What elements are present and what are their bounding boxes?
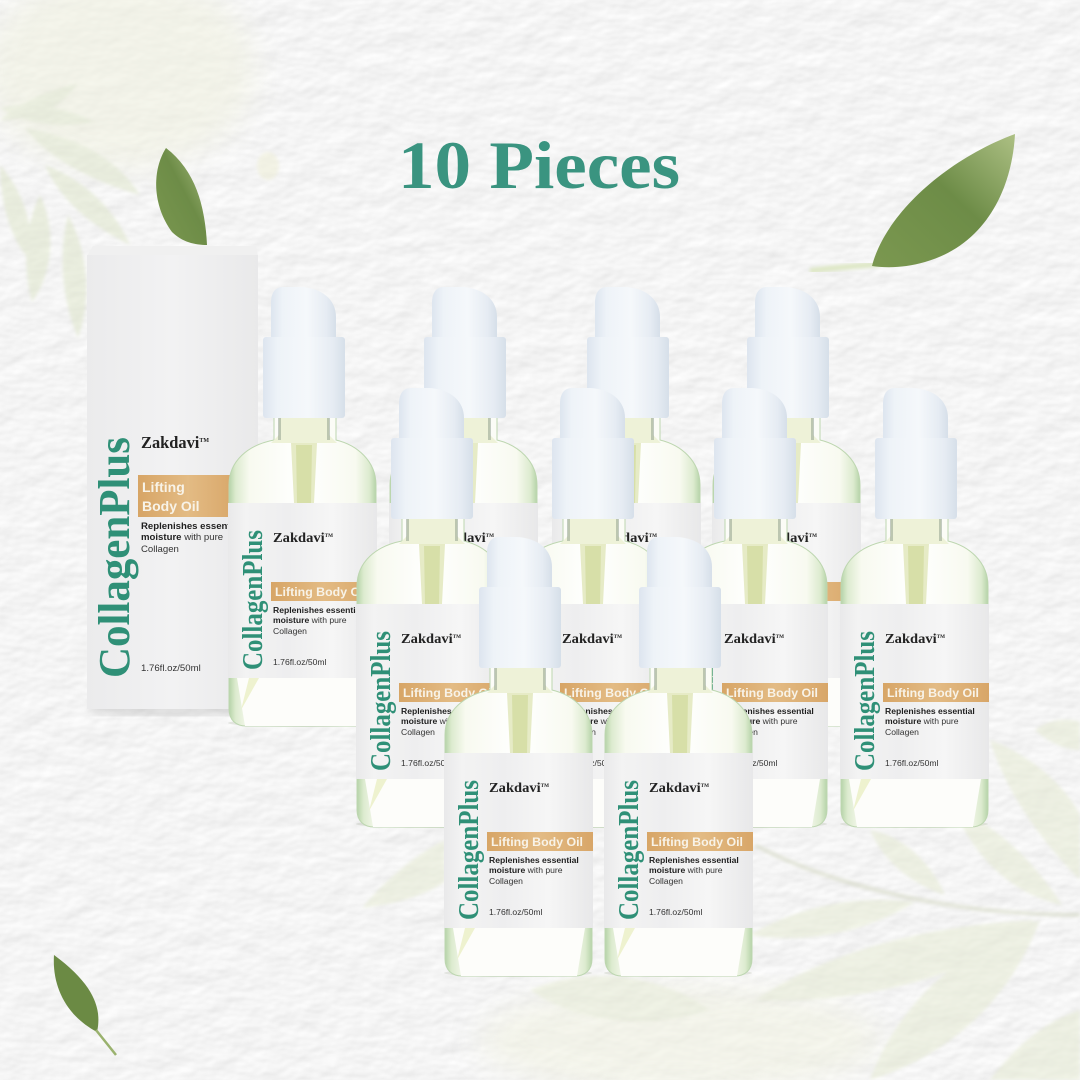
- bottle middle row 4: [840, 388, 989, 828]
- box brand: CollagenPlus: [90, 437, 139, 678]
- bottle middle row 3: with pure: [760, 716, 798, 726]
- bottle front row 2: [604, 537, 753, 977]
- bottle front row 2: 1.76fl.oz/50ml: [649, 907, 703, 917]
- bottle back row 3: Zakdavi: [757, 531, 807, 546]
- box band: [138, 475, 238, 517]
- box maker: TM: [199, 438, 209, 444]
- bottle back row 1: TM: [486, 534, 494, 539]
- box description: Collagen: [141, 544, 179, 555]
- bottle middle row 4: moisture: [885, 716, 922, 726]
- bottle middle row 2: 1.76fl.oz/50ml: [562, 758, 616, 768]
- bottle front row 2: with pure: [685, 865, 723, 875]
- bottle beside box: Zakdavi: [273, 531, 323, 546]
- bottle beside box: Lifting Body Oil: [275, 585, 367, 599]
- bottle back row 1: Zakdavi: [434, 531, 484, 546]
- bottle middle row 3: CollagenPlus: [689, 631, 720, 771]
- bottle middle row 1: CollagenPlus: [366, 631, 397, 771]
- bottle back row 2: TM: [649, 534, 657, 539]
- bottle middle row 1: with pure: [437, 716, 475, 726]
- bottle front row 2: moisture: [649, 865, 686, 875]
- bottle middle row 4: TM: [937, 635, 945, 640]
- bottle beside box: with pure: [309, 615, 347, 625]
- bottle middle row 3: Replenishes essential: [724, 706, 814, 716]
- bottle back row 1: [389, 287, 538, 727]
- bottle middle row 2: moisture: [562, 716, 599, 726]
- bottle middle row 2: [517, 388, 666, 828]
- bottle middle row 4: CollagenPlus: [850, 631, 881, 771]
- bottle front row 1: Replenishes essential: [489, 855, 579, 865]
- bottle back row 2: Zakdavi: [597, 531, 647, 546]
- bottle middle row 3: 1.76fl.oz/50ml: [724, 758, 778, 768]
- product box: [87, 246, 258, 715]
- bottle front row 1: with pure: [525, 865, 563, 875]
- box size: 1.76fl.oz/50ml: [141, 663, 201, 674]
- bottle middle row 1: Collagen: [401, 727, 435, 737]
- bottle middle row 3: TM: [776, 635, 784, 640]
- bottle front row 2: Zakdavi: [649, 781, 699, 796]
- bottle middle row 2: TM: [614, 635, 622, 640]
- bottle middle row 4: Collagen: [885, 727, 919, 737]
- bottle middle row 1: TM: [453, 635, 461, 640]
- bottle back row 2: [552, 287, 701, 727]
- bottle middle row 2: CollagenPlus: [527, 631, 558, 771]
- bottle front row 1: TM: [541, 784, 549, 789]
- bottle back row 3: [712, 287, 861, 727]
- box band text: Lifting: [142, 479, 185, 495]
- box description: with pure: [182, 532, 223, 543]
- bottle middle row 2: Lifting Body Oil: [564, 686, 656, 700]
- bottle beside box: moisture: [273, 615, 310, 625]
- bottle middle row 2: Collagen: [562, 727, 596, 737]
- box description: Replenishes essential: [141, 521, 241, 532]
- bottle front row 2: CollagenPlus: [614, 780, 645, 920]
- bottle front row 1: moisture: [489, 865, 526, 875]
- bottle beside box: CollagenPlus: [238, 530, 269, 670]
- bottle middle row 2: Replenishes essential: [562, 706, 652, 716]
- bottle middle row 1: Replenishes essential: [401, 706, 491, 716]
- box band text: Body Oil: [142, 498, 200, 514]
- icon: leaf top left: [156, 148, 207, 245]
- bottle front row 1: Zakdavi: [489, 781, 539, 796]
- bottle middle row 3: [679, 388, 828, 828]
- bottle front row 1: [444, 537, 593, 977]
- bottle front row 2: Replenishes essential: [649, 855, 739, 865]
- background watercolor foliage: top left: [0, 0, 279, 338]
- background watercolor foliage: bottom right: [362, 720, 1080, 1080]
- bottle middle row 4: Replenishes essential: [885, 706, 975, 716]
- bottle front row 2: Lifting Body Oil: [651, 835, 743, 849]
- bottle front row 1: Collagen: [489, 876, 523, 886]
- bottle beside box: [228, 287, 377, 727]
- bottle middle row 3: moisture: [724, 716, 761, 726]
- bottle middle row 4: Lifting Body Oil: [887, 686, 979, 700]
- bottle middle row 3: Zakdavi: [724, 632, 774, 647]
- box description: moisture: [141, 532, 182, 543]
- box maker: Zakdavi: [141, 433, 200, 452]
- bottle beside box: Collagen: [273, 626, 307, 636]
- bottle middle row 1: Lifting Body Oil: [403, 686, 495, 700]
- bottle middle row 4: 1.76fl.oz/50ml: [885, 758, 939, 768]
- bottle middle row 2: Zakdavi: [562, 632, 612, 647]
- bottle middle row 1: moisture: [401, 716, 438, 726]
- bottle front row 2: Collagen: [649, 876, 683, 886]
- bottle middle row 1: Zakdavi: [401, 632, 451, 647]
- bottle middle row 2: with pure: [598, 716, 636, 726]
- bottle middle row 1: 1.76fl.oz/50ml: [401, 758, 455, 768]
- bottle front row 1: CollagenPlus: [454, 780, 485, 920]
- bottle front row 2: TM: [701, 784, 709, 789]
- bottle middle row 1: [356, 388, 505, 828]
- bottle middle row 3: Collagen: [724, 727, 758, 737]
- bottle front row 1: 1.76fl.oz/50ml: [489, 907, 543, 917]
- bottle middle row 4: with pure: [921, 716, 959, 726]
- bottle back row 3: TM: [809, 534, 817, 539]
- bottle beside box: 1.76fl.oz/50ml: [273, 657, 327, 667]
- bottle beside box: TM: [325, 534, 333, 539]
- icon: leaf top right: [810, 134, 1015, 271]
- title: 10 Pieces: [398, 127, 680, 203]
- bottle middle row 4: Zakdavi: [885, 632, 935, 647]
- icon: leaf bottom left: [54, 955, 116, 1055]
- bottle middle row 3: Lifting Body Oil: [726, 686, 818, 700]
- bottle beside box: Replenishes essential: [273, 605, 363, 615]
- bottle front row 1: Lifting Body Oil: [491, 835, 583, 849]
